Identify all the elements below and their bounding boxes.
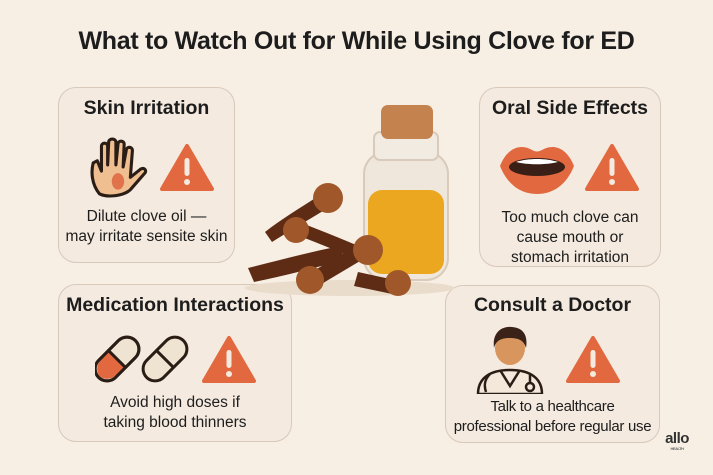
panel: oral side effects	[479, 87, 661, 267]
heading: oral: Oral Side Effects	[492, 97, 648, 119]
icon: lips	[500, 147, 574, 194]
text: consult	[454, 398, 651, 435]
icon: doctor	[476, 326, 544, 394]
panel: consult a doctor	[445, 285, 660, 443]
heading: skin irritation: Skin Irritation	[84, 97, 209, 119]
icon: warning	[202, 336, 256, 383]
text: oral: cause mouth or	[517, 229, 623, 246]
text: skin: may irritate sensite skin	[66, 228, 227, 245]
icon: pills	[95, 336, 188, 382]
text: oral: stomach irritation	[511, 249, 629, 266]
bottle	[364, 152, 448, 280]
logo: allo health: HEALTH	[671, 446, 683, 451]
illustration: cloves and oil bottle	[245, 105, 455, 296]
text: skin: Dilute clove oil —	[87, 208, 206, 225]
icon: warning	[585, 144, 640, 191]
icon: warning	[566, 336, 620, 383]
text: oral: Too much clove can	[502, 209, 638, 226]
heading: medication: Medication Interactions	[66, 294, 284, 316]
heading: consult: Consult a Doctor	[474, 294, 631, 316]
icon: hand	[90, 138, 148, 198]
panel: medication interactions	[58, 284, 292, 442]
text: consult: professional before regular use	[454, 418, 651, 435]
text: skin	[66, 208, 227, 245]
logo: allo health: allo	[665, 430, 689, 447]
title: What to Watch Out for While Using Clove for ED	[78, 27, 635, 55]
text: consult: Talk to a healthcare	[490, 398, 615, 415]
text: medication	[103, 394, 247, 431]
cloves	[248, 195, 395, 294]
icon: warning	[160, 144, 214, 191]
panel: skin irritation	[58, 87, 235, 263]
text: medication: taking blood thinners	[103, 414, 247, 431]
text: medication: Avoid high doses if	[110, 394, 240, 411]
text: oral	[502, 209, 638, 266]
